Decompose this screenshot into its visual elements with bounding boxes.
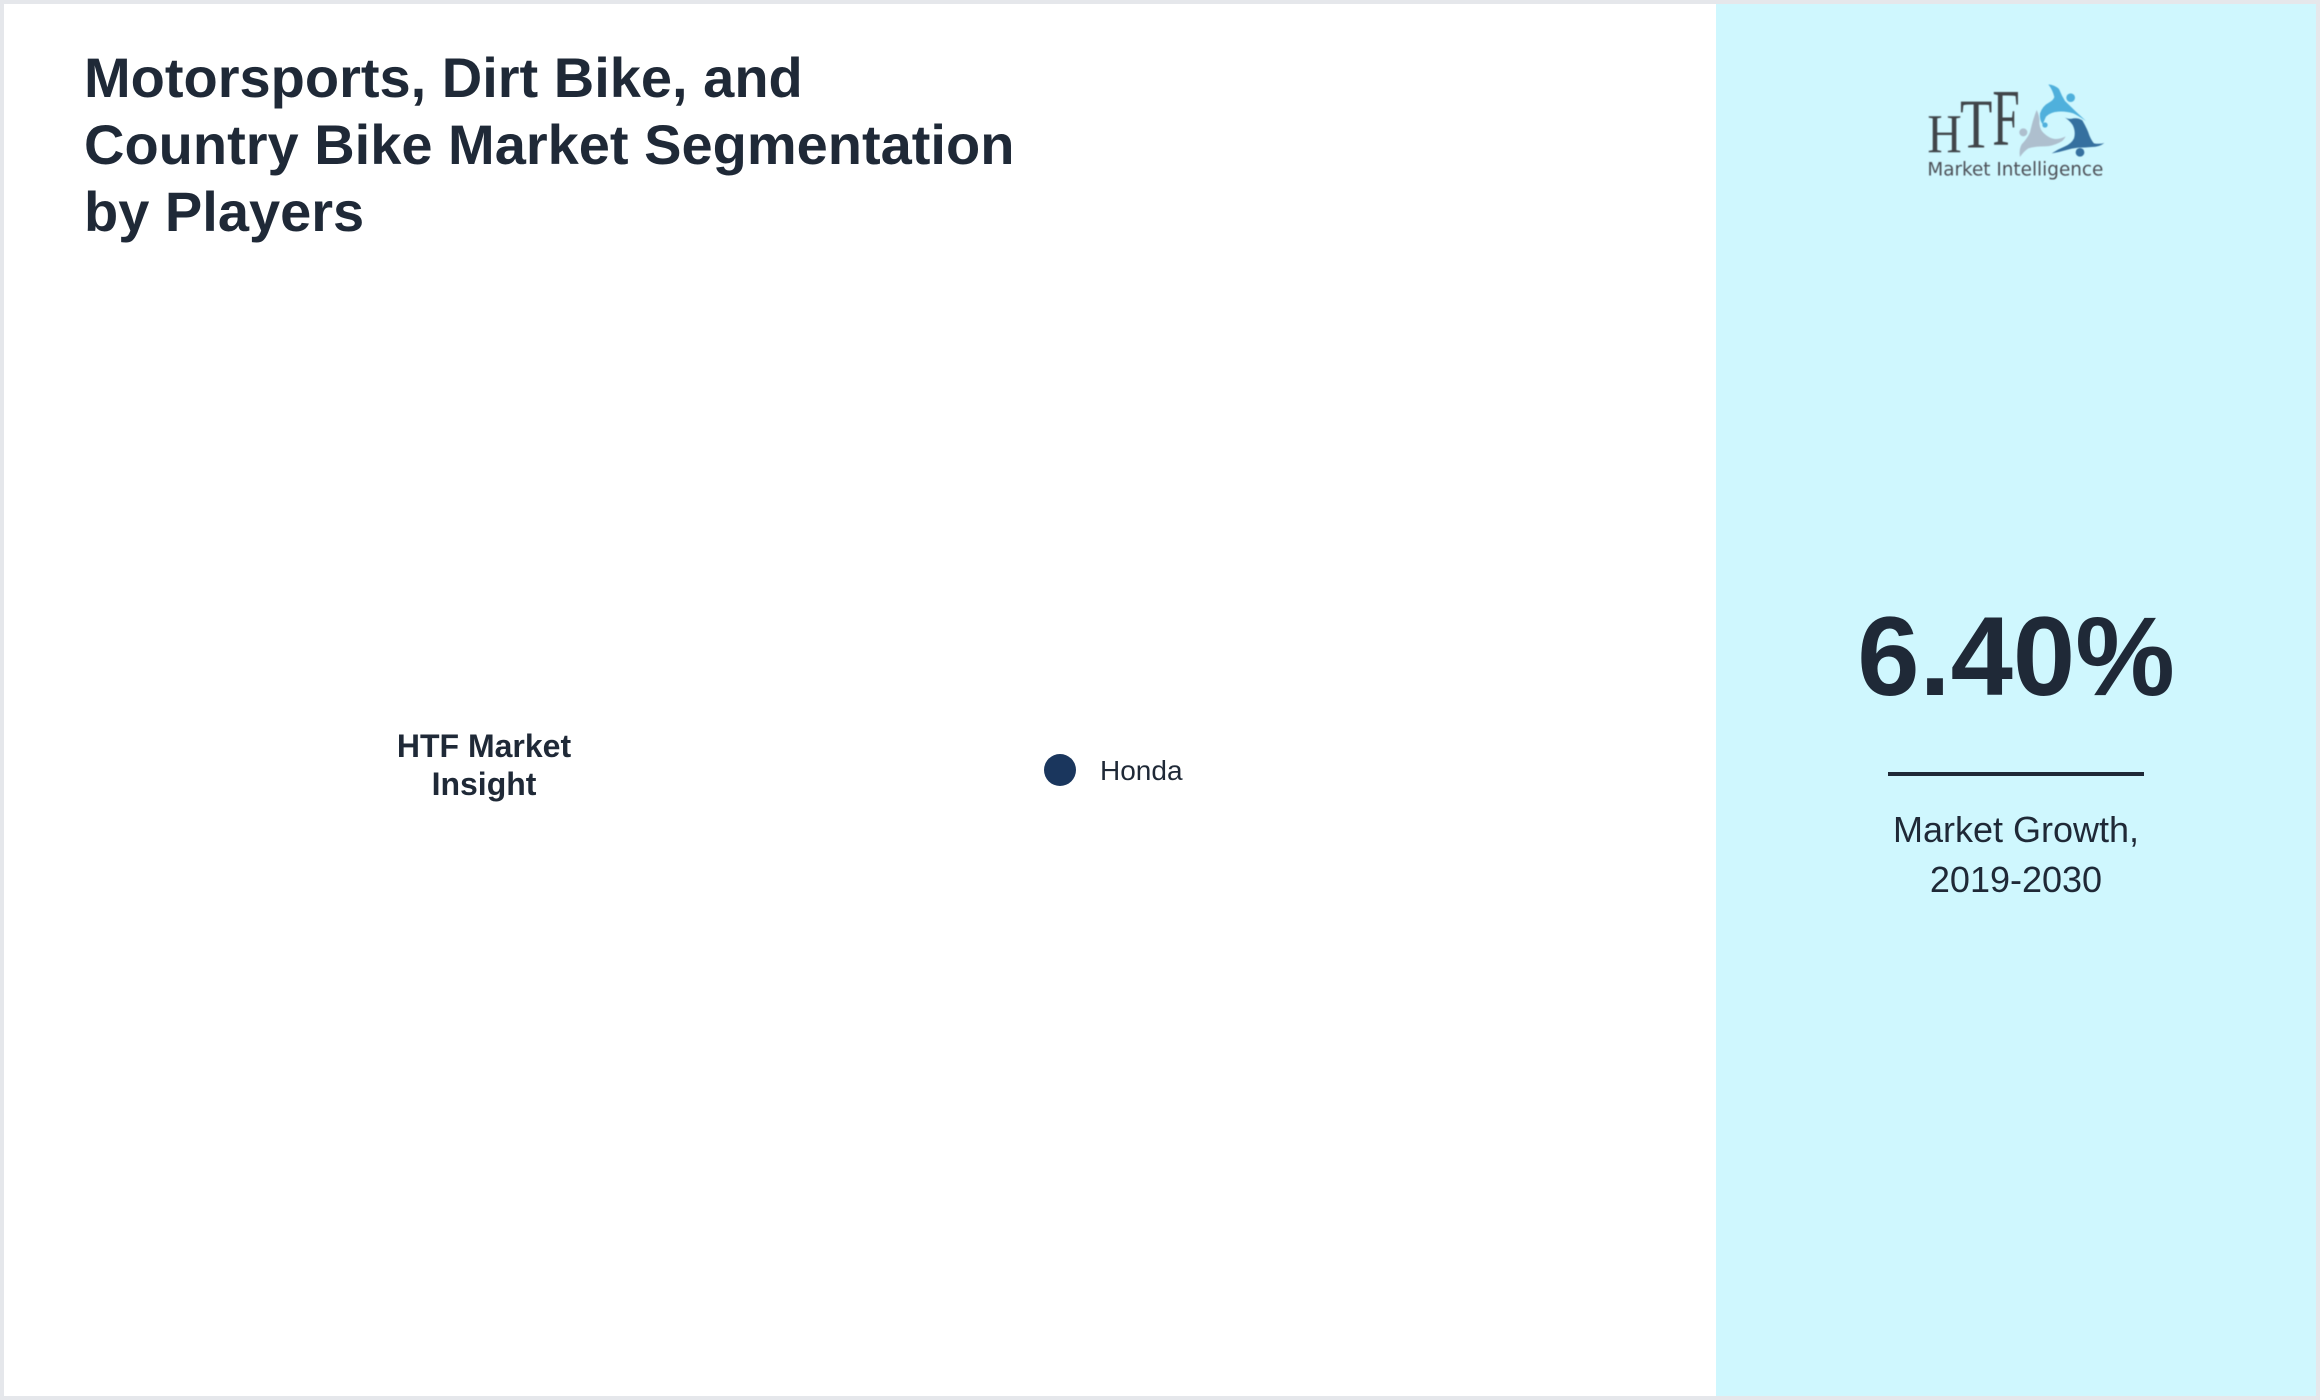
legend label: Honda xyxy=(1100,755,1183,786)
logo wordmark: Market Intelligence xyxy=(1927,160,2103,181)
panel: market growth xyxy=(1716,4,2316,1396)
logo letters: T xyxy=(1960,86,1992,164)
legend marker xyxy=(1044,754,1076,786)
logo figures xyxy=(2019,84,2104,157)
title: Country Bike Market Segmentation xyxy=(84,113,1014,176)
chart center label xyxy=(397,728,571,802)
chart center label: Insight xyxy=(432,766,536,802)
chart center label: HTF Market xyxy=(397,728,571,764)
logo figure: light blue xyxy=(2040,84,2086,128)
title xyxy=(84,46,1014,243)
logo letters: H xyxy=(1927,103,1962,164)
legend: Honda xyxy=(1044,754,1183,786)
logo figure: grey xyxy=(2019,110,2066,157)
logo letters: F xyxy=(1992,74,2020,163)
divider xyxy=(1888,772,2144,776)
logo letters xyxy=(1927,74,2020,164)
logo: HTF Market Intelligence xyxy=(1927,74,2104,181)
growth value: 6.40% xyxy=(1857,594,2175,719)
growth caption: 2019-2030 xyxy=(1930,859,2102,900)
title: Motorsports, Dirt Bike, and xyxy=(84,46,803,109)
growth caption xyxy=(1893,809,2139,900)
growth caption: Market Growth, xyxy=(1893,809,2139,850)
logo figure: dark blue xyxy=(2052,117,2104,157)
title: by Players xyxy=(84,180,364,243)
